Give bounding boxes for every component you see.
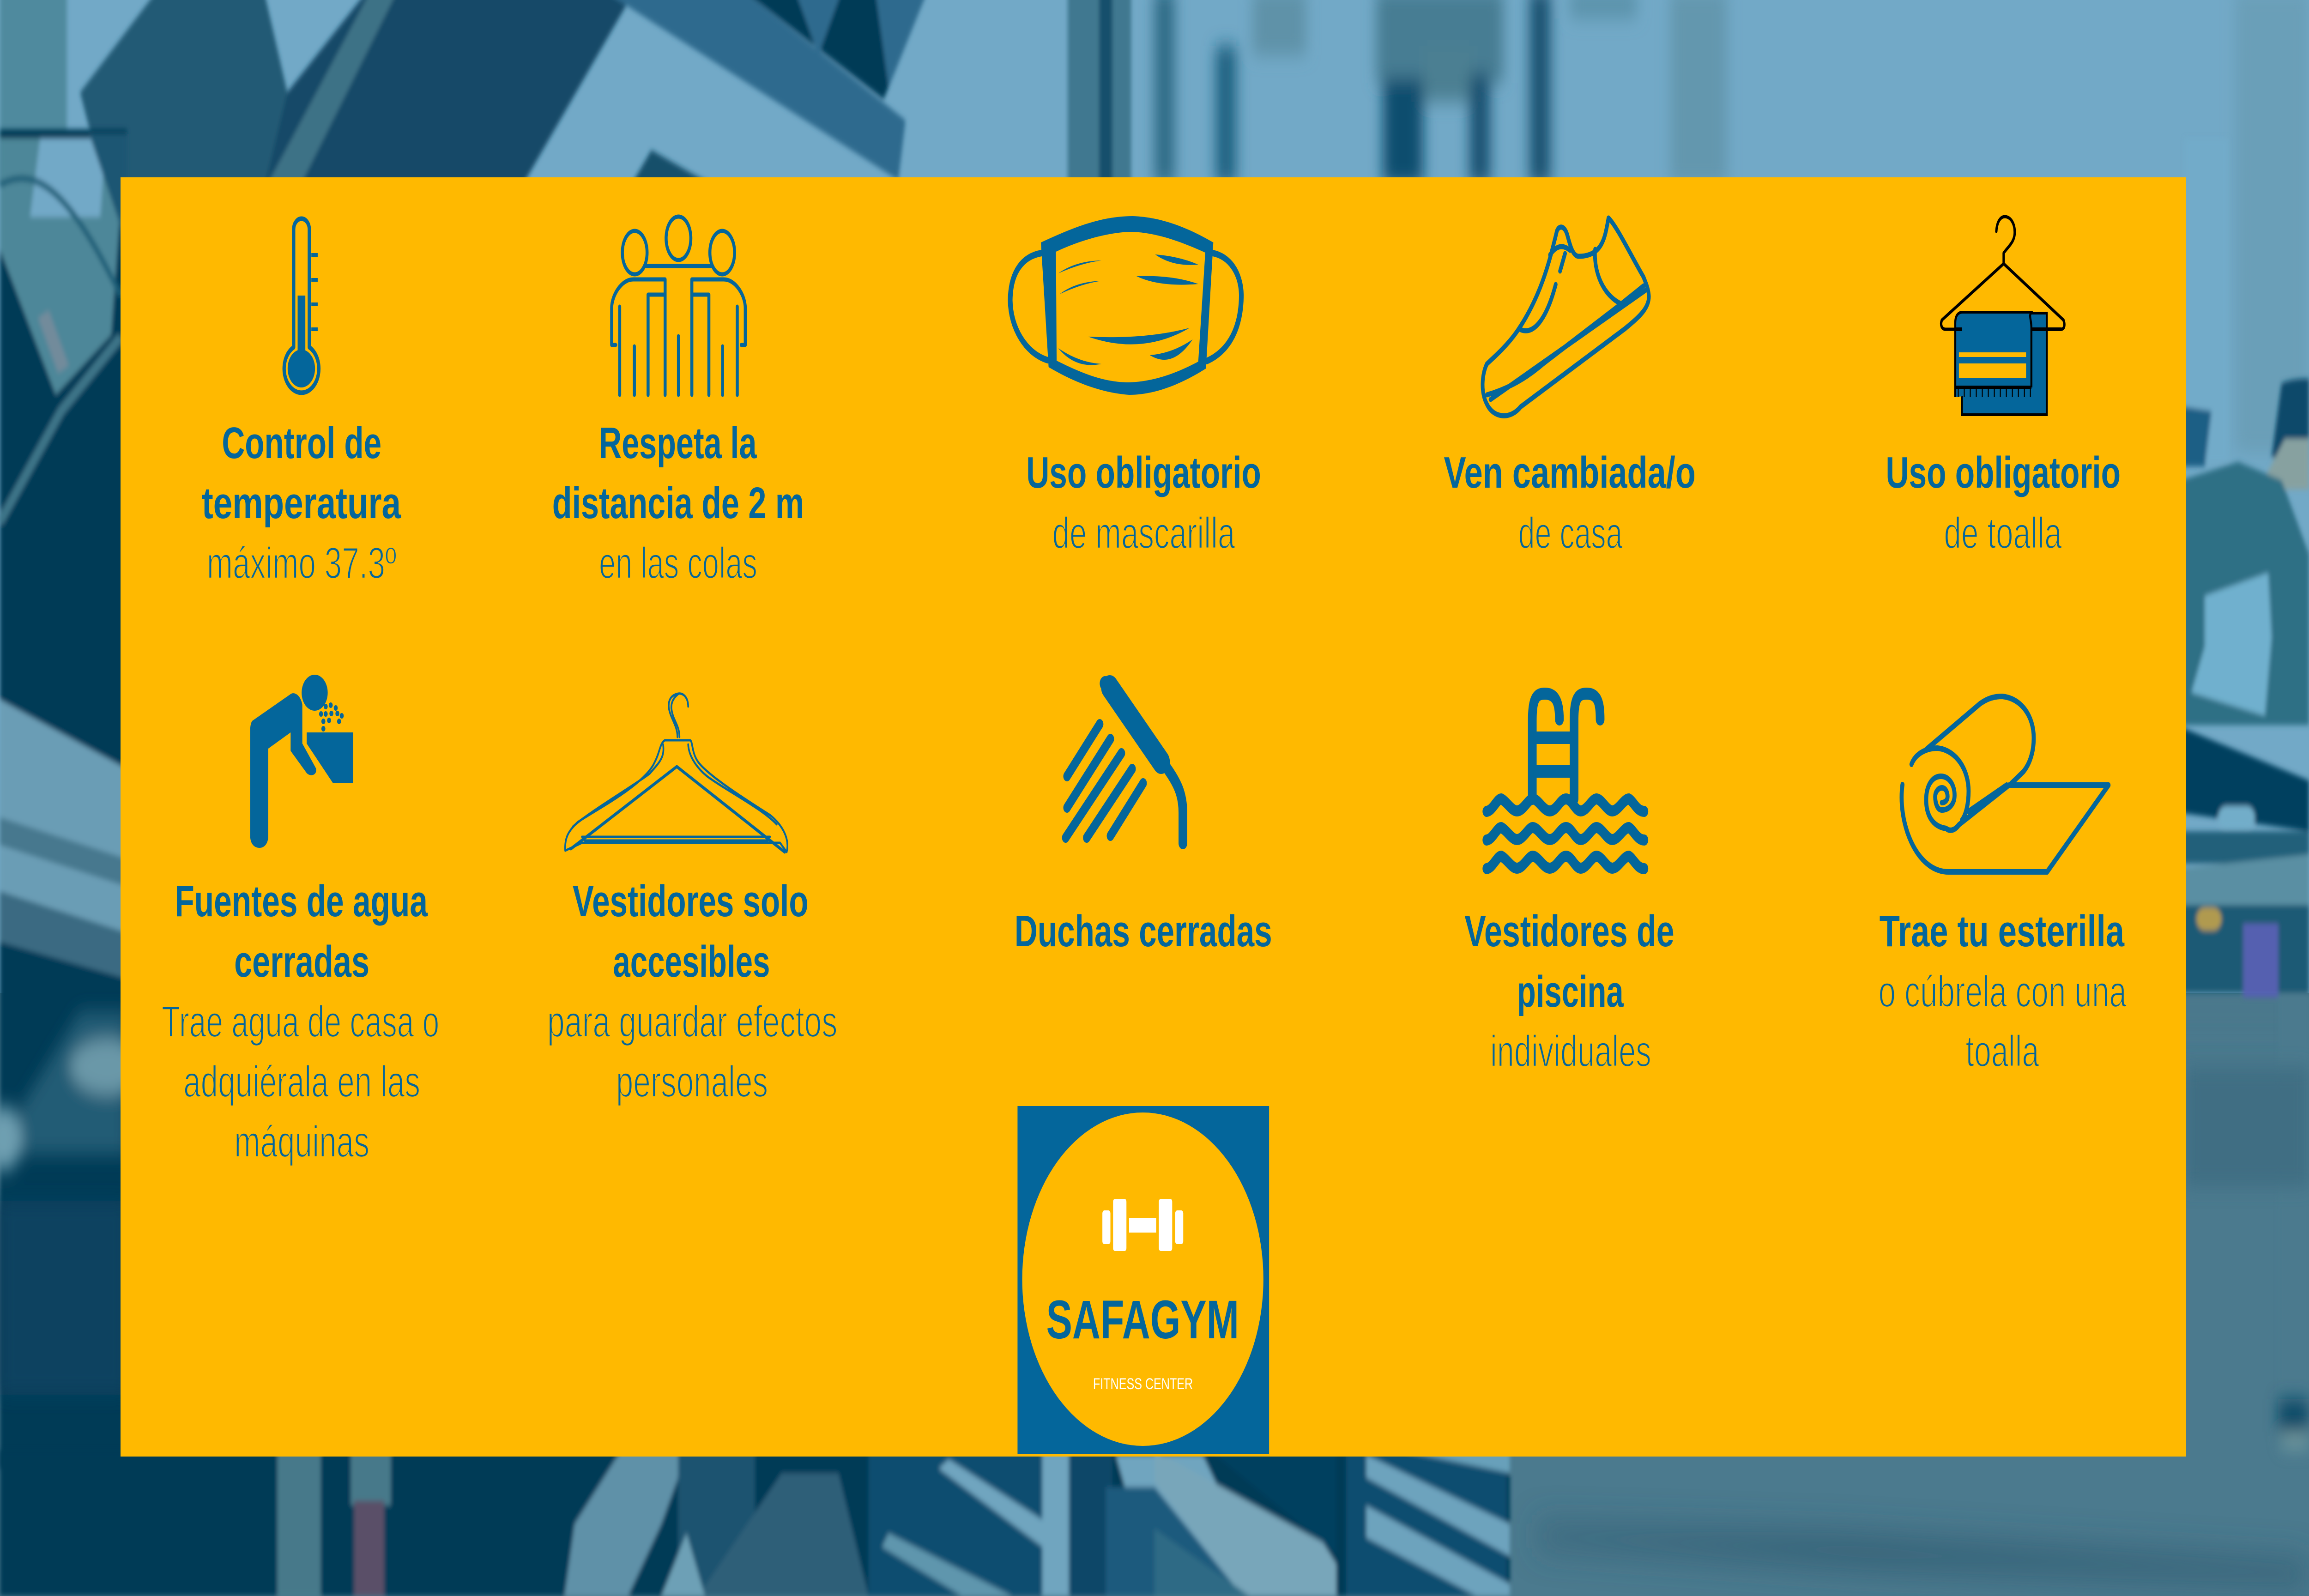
text: personal belongings: personales [616,1057,768,1106]
item: come changed [1444,218,1696,558]
icon: towel on hanger [1941,217,2064,415]
panel: yellow rules card [121,177,2186,1457]
icon: coat hanger [565,694,787,852]
heading: uso obligatorio: Uso obligatorio [1886,447,2121,497]
heading: fuentes de agua: cerradas [234,937,369,986]
heading: respeta la distancia: distancia de 2 m [552,478,804,528]
heading: trae tu esterilla: Trae tu esterilla [1880,906,2125,956]
heading: vestidores de piscina: piscina [1517,967,1624,1016]
icon: rolled mat [1902,696,2109,872]
item: water fountains closed [162,675,439,1167]
heading: vestidores de piscina [1464,906,1674,1016]
heading: vestidores solo accesibles: Vestidores solo [573,876,809,926]
text: bring water: Trae agua de casa o [162,997,439,1046]
logo tagline: FITNESS CENTER [1093,1375,1193,1393]
heading: control de temperatura [202,418,401,528]
heading: vestidores solo accesibles: accesibles [613,937,770,986]
item: changing rooms [547,694,838,1106]
icon: pool ladder and waves [1487,694,1644,869]
item: temperature control [202,218,401,588]
text: personal belongings: para guardar efectos [547,997,838,1046]
heading: control de temperatura: temperatura [202,478,401,528]
icon: shower head [1066,676,1183,843]
text: de casa: de casa [1518,508,1623,558]
background bottom strip: dumbbells [0,1450,1510,1596]
text: bring water: máquinas [234,1117,369,1167]
heading: vestidores de piscina: Vestidores de [1464,906,1674,956]
logo: SAFAGYM fitness center [1017,1106,1269,1454]
background right strip [2182,139,2309,1455]
item: towel required [1886,217,2121,558]
icon: dumbbell [1102,1199,1183,1251]
icon: thermometer [284,218,319,393]
text: cover mat with towel: toalla [1965,1026,2039,1076]
heading: respeta la distancia: Respeta la [599,418,757,468]
item: bring your mat [1879,696,2127,1076]
background left strip [0,129,127,1469]
item: mask required [1010,216,1261,558]
text: maximum temperature: máximo 37.3º [207,538,397,588]
icon: face mask [1010,216,1241,395]
item: showers closed [1015,676,1272,956]
heading: respeta la distancia [552,418,804,528]
text: de toalla: de toalla [1944,508,2062,558]
heading: ven cambiada: Ven cambiada/o [1444,447,1696,497]
heading: fuentes de agua: Fuentes de agua [175,876,428,926]
icon: sneaker [1483,218,1649,416]
text: bring water: adquiérala en las [183,1057,420,1106]
heading: fuentes de agua [175,876,428,986]
heading: duchas cerradas: Duchas cerradas [1015,906,1272,956]
text: personal belongings [547,997,838,1106]
item: keep distance [552,217,804,588]
text: de mascarilla: de mascarilla [1052,508,1235,558]
text: bring water [162,997,439,1167]
text: cover mat with towel: o cúbrela con una [1879,967,2127,1016]
icon: three people [612,217,745,395]
text: cover mat with towel [1879,967,2127,1076]
item: pool changing rooms [1464,694,1674,1076]
heading: control de temperatura: Control de [222,418,381,468]
text: individuales: individuales [1490,1026,1651,1076]
heading: vestidores solo accesibles [573,876,809,986]
heading: uso obligatorio: Uso obligatorio [1026,447,1261,497]
logo name: SAFAGYM [1046,1289,1239,1350]
text: queues: en las colas [599,538,757,588]
icon: drinking fountain [250,675,353,848]
